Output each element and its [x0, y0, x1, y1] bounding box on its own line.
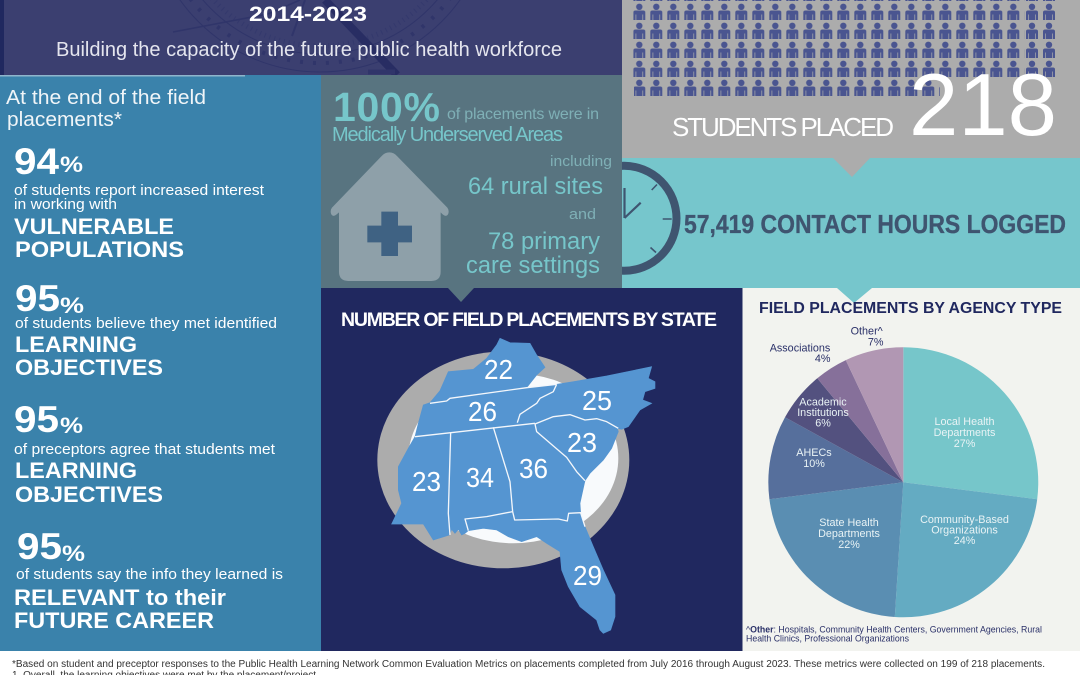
stat: 94% vulnerable populations: VULNERABLE — [14, 214, 174, 239]
pie labels inside slices: Local Health — [934, 416, 995, 428]
stat: 94% vulnerable populations: in working with — [14, 196, 117, 213]
stat: 95% preceptors agree: 95 — [14, 399, 59, 440]
map values: placements per state: 29 — [573, 560, 602, 591]
panel: placements by state — [321, 288, 742, 651]
pie labels inside slices: Departments — [818, 528, 881, 540]
panel: students placed — [622, 0, 1080, 158]
stat: 95% relevant to career: RELEVANT to their — [14, 585, 226, 610]
pie labels inside slices: 27% — [954, 438, 976, 450]
panel: placements by agency type — [741, 288, 1080, 651]
stat: 94% vulnerable populations: 94 — [14, 141, 59, 182]
heading: years: 2014-2023 — [249, 3, 367, 26]
pie labels outside slices: 7% — [868, 336, 884, 348]
subheading: Building the capacity of the future public health workforce — [56, 39, 562, 61]
footer notes: *Based on student and preceptor responses to the Public Health Learning Network Common Evaluation Metrics on placements completed from July 2016 through August 2023. These metrics were collected on 199 of 218 placements. — [12, 659, 1045, 670]
text: including: including — [550, 153, 612, 170]
pie labels inside slices: 24% — [954, 535, 976, 547]
stat: 95% students met objectives: % — [60, 293, 84, 318]
map values: placements per state — [412, 354, 612, 591]
pie labels outside slices — [770, 326, 884, 365]
stat: 95% students met objectives: of students believe they met identified — [15, 315, 277, 332]
stat: 95% preceptors agree: OBJECTIVES — [15, 482, 163, 507]
stat: 95% students met objectives: LEARNING — [15, 332, 137, 357]
map values: placements per state: 23 — [412, 466, 441, 497]
map values: placements per state: 22 — [484, 354, 513, 385]
pie labels inside slices — [796, 396, 1009, 551]
text: 78 primary care settings: 78 primary — [488, 228, 600, 255]
footnote: other category: Health Clinics, Professional Organizations — [746, 634, 909, 644]
pie labels inside slices: Departments — [934, 427, 996, 439]
stat: 95% students met objectives: OBJECTIVES — [15, 355, 163, 380]
stat: 95% relevant to career: % — [62, 541, 85, 566]
stat: 94% vulnerable populations: of students report increased interest — [14, 182, 265, 199]
heading: at the end of the field placements: At the end of the field — [6, 87, 206, 109]
stat: 95% preceptors agree: LEARNING — [15, 458, 137, 483]
pie chart: agency types — [768, 347, 1038, 617]
stat: 95% relevant to career — [14, 526, 283, 633]
map values: placements per state: 23 — [567, 427, 597, 458]
panel: medically underserved areas — [321, 75, 622, 288]
number: 218: 218 — [909, 55, 1057, 154]
heading: field placements by agency type: FIELD PLACEMENTS BY AGENCY TYPE — [759, 300, 1062, 317]
pie labels inside slices: 22% — [838, 539, 860, 551]
pie labels inside slices: 6% — [815, 418, 831, 430]
footer notes — [12, 659, 1045, 675]
panel: outcomes at end of field placements — [0, 75, 321, 651]
map values: placements per state: 25 — [582, 385, 612, 416]
stat: 95% students met objectives — [15, 278, 277, 380]
stat: 95% preceptors agree: of preceptors agree that students met — [14, 441, 276, 458]
text: medically underserved areas: Medically Underserved Areas — [332, 124, 563, 146]
pie labels inside slices: Institutions — [797, 407, 849, 419]
text: 78 primary care settings: care settings — [466, 252, 600, 279]
icon: clock — [572, 166, 676, 271]
stat: 100%: 100% — [333, 84, 440, 130]
text: 78 primary care settings — [466, 228, 600, 279]
stat: 95% preceptors agree — [14, 399, 276, 507]
pie labels outside slices: Associations — [770, 342, 831, 354]
map values: placements per state: 36 — [519, 453, 548, 484]
stat: 95% relevant to career: of students say the info they learned is — [16, 566, 283, 583]
pointer: students panel — [833, 158, 870, 177]
text: and: and — [569, 206, 596, 223]
icon: house with medical cross — [331, 152, 449, 281]
pie labels inside slices: Academic — [799, 396, 847, 408]
heading: number of field placements by state: NUMBER OF FIELD PLACEMENTS BY STATE — [341, 309, 717, 331]
pie labels outside slices: 4% — [815, 353, 831, 365]
stat: 95% relevant to career: FUTURE CAREER — [14, 608, 214, 633]
text: of placements were in: of placements were in — [447, 106, 599, 123]
stat: 95% relevant to career: 95 — [17, 526, 62, 567]
label: students placed: STUDENTS PLACED — [672, 112, 894, 142]
footnote: other category — [746, 624, 1042, 644]
footnote: other category: ^Other: Hospitals, Community Health Centers, Government Agencies, Rural — [746, 624, 1042, 634]
pie labels inside slices: 10% — [803, 458, 825, 470]
map: southeastern states — [377, 338, 655, 633]
pie labels inside slices: Community-Based — [920, 514, 1009, 526]
pointer: contact hours panel — [837, 288, 872, 303]
pie labels outside slices: Other^ — [851, 326, 884, 338]
icon: grid of student figures — [633, 0, 1060, 98]
panel: header — [0, 0, 622, 75]
heading: at the end of the field placements — [6, 87, 206, 131]
text: 64 rural sites: 64 rural sites — [468, 173, 603, 200]
stat: 94% vulnerable populations: % — [60, 152, 83, 177]
stat: 95% preceptors agree: % — [60, 413, 83, 438]
pie labels inside slices: Organizations — [931, 524, 998, 536]
pie labels inside slices: AHECs — [796, 447, 832, 459]
pie labels inside slices: State Health — [819, 517, 879, 529]
icon: compass backdrop — [173, 0, 460, 75]
map values: placements per state: 26 — [468, 396, 497, 427]
stat: 95% students met objectives: 95 — [15, 278, 60, 319]
stat: 94% vulnerable populations — [14, 141, 265, 262]
heading: at the end of the field placements: placements* — [7, 109, 122, 131]
map values: placements per state: 34 — [466, 462, 494, 493]
pointer: underserved panel — [448, 288, 474, 302]
panel: contact hours — [572, 158, 1080, 288]
stat: 94% vulnerable populations: POPULATIONS — [15, 237, 184, 262]
